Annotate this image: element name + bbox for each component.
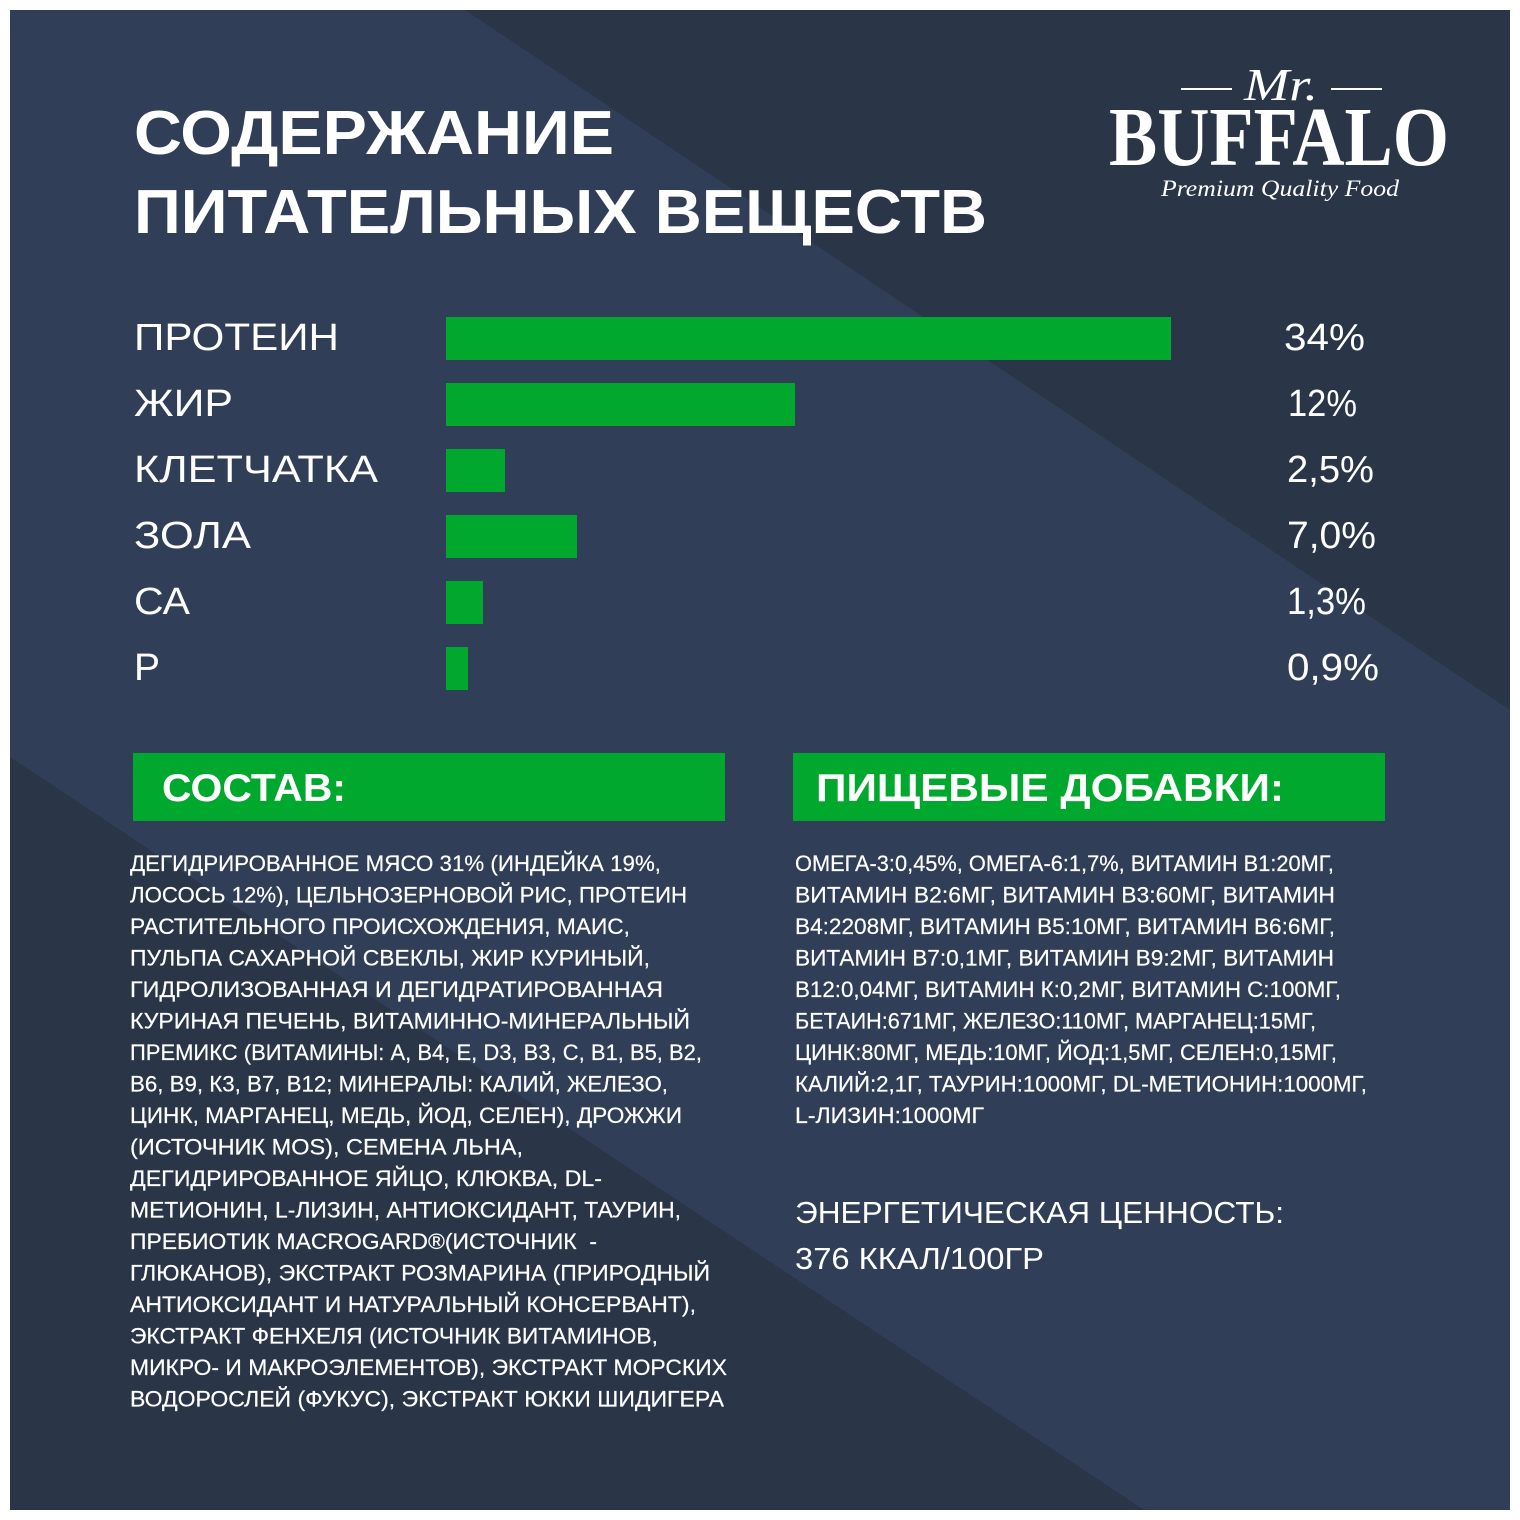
text block: composition: В6, В9, К3, В7, В12; МИНЕРАЛЫ: КАЛИЙ, ЖЕЛЕЗО, [130,1072,668,1096]
text block: composition [130,851,727,1412]
text block: additives [795,851,1367,1128]
text block: additives: L-ЛИЗИН:1000МГ [795,1103,984,1128]
text block: composition: ГИДРОЛИЗОВАННАЯ И ДЕГИДРАТИРОВАННАЯ [130,977,663,1002]
text block: composition: ВОДОРОСЛЕЙ (ФУКУС), ЭКСТРАКТ ЮККИ ШИДИГЕРА [130,1386,724,1412]
text block: additives: ВИТАМИН В2:6МГ, ВИТАМИН В3:60МГ, ВИТАМИН [795,882,1335,908]
title: СОДЕРЖАНИЕ [134,99,614,168]
text block: composition: ДЕГИДРИРОВАННОЕ ЯЙЦО, КЛЮКВА, DL- [130,1166,602,1191]
text block: energy value [795,1195,1284,1276]
logo: Mr. Buffalo [1109,59,1449,201]
logo: Mr. Buffalo: Premium Quality Food [1160,176,1400,201]
row: calcium: 1,3% [1287,581,1366,623]
text block: composition: ЭКСТРАКТ ФЕНХЕЛЯ (ИСТОЧНИК ВИТАМИНОВ, [130,1324,658,1348]
row: calcium: СА [134,581,191,623]
text block: composition: ЛОСОСЬ 12%), ЦЕЛЬНОЗЕРНОВОЙ РИС, ПРОТЕИН [130,882,687,908]
text block: composition: (ИСТОЧНИК MOS), СЕМЕНА ЛЬНА, [130,1134,523,1160]
row: protein: ПРОТЕИН [134,317,339,359]
row: ash [134,515,1376,558]
text block: additives: ОМЕГА-3:0,45%, ОМЕГА-6:1,7%, ВИТАМИН В1:20МГ, [795,851,1334,876]
text block: additives: БЕТАИН:671МГ, ЖЕЛЕЗО:110МГ, МАРГАНЕЦ:15МГ, [795,1008,1316,1034]
row: ash: 7,0% [1287,515,1376,557]
row: protein [134,317,1365,360]
row: ash: ЗОЛА [134,515,252,557]
row: phosphorus [134,647,1379,690]
text block: composition: МЕТИОНИН, L-ЛИЗИН, АНТИОКСИДАНТ, ТАУРИН, [130,1198,681,1222]
text block: energy value: 376 ККАЛ/100ГР [795,1241,1044,1276]
bar chart: nutrients [134,317,1379,690]
text block: additives: КАЛИЙ:2,1Г, ТАУРИН:1000МГ, DL-МЕТИОНИН:1000МГ, [795,1072,1367,1096]
text block: additives: В12:0,04МГ, ВИТАМИН К:0,2МГ, ВИТАМИН С:100МГ, [795,977,1341,1002]
text block: composition: ГЛЮКАНОВ), ЭКСТРАКТ РОЗМАРИНА (ПРИРОДНЫЙ [130,1260,710,1286]
text block: composition: КУРИНАЯ ПЕЧЕНЬ, ВИТАМИННО-МИНЕРАЛЬНЫЙ [130,1008,690,1034]
text block: composition: МИКРО- И МАКРОЭЛЕМЕНТОВ), ЭКСТРАКТ МОРСКИХ [130,1355,727,1380]
text block: composition: ПРЕМИКС (ВИТАМИНЫ: А, В4, Е, D3, В3, С, В1, В5, В2, [130,1040,702,1065]
heading: additives [793,753,1385,821]
text block: energy value: ЭНЕРГЕТИЧЕСКАЯ ЦЕННОСТЬ: [795,1195,1284,1230]
title: ПИТАТЕЛЬНЫХ ВЕЩЕСТВ [134,178,987,247]
heading: composition [133,753,725,821]
logo: Mr. Buffalo: Mr. [1243,59,1318,110]
text block: composition: ПУЛЬПА САХАРНОЙ СВЕКЛЫ, ЖИР КУРИНЫЙ, [130,946,650,970]
row: fat: 12% [1288,383,1357,425]
text block: additives: В4:2208МГ, ВИТАМИН В5:10МГ, ВИТАМИН В6:6МГ, [795,914,1335,939]
text block: additives: ВИТАМИН В7:0,1МГ, ВИТАМИН В9:2МГ, ВИТАМИН [795,946,1334,970]
title [134,99,987,247]
text block: composition: ЦИНК, МАРГАНЕЦ, МЕДЬ, ЙОД, СЕЛЕН), ДРОЖЖИ [130,1103,682,1128]
row: phosphorus: Р [134,647,160,689]
row: fat [134,383,1357,426]
heading: additives: ПИЩЕВЫЕ ДОБАВКИ: [816,767,1284,810]
logo: Mr. Buffalo: BUFFALO [1109,91,1449,184]
row: fibre: 2,5% [1287,449,1374,491]
text block: additives: ЦИНК:80МГ, МЕДЬ:10МГ, ЙОД:1,5МГ, СЕЛЕН:0,15МГ, [795,1040,1337,1065]
row: phosphorus: 0,9% [1287,647,1379,689]
text block: composition: ДЕГИДРИРОВАННОЕ МЯСО 31% (ИНДЕЙКА 19%, [130,851,661,876]
text block: composition: АНТИОКСИДАНТ И НАТУРАЛЬНЫЙ КОНСЕРВАНТ), [130,1292,696,1317]
text block: composition: ПРЕБИОТИК MACROGARD®(ИСТОЧНИК - [130,1229,597,1254]
row: calcium [134,581,1366,624]
row: fibre: КЛЕТЧАТКА [134,449,379,491]
row: protein: 34% [1284,317,1365,359]
row: fibre [134,449,1374,492]
row: fat: ЖИР [134,383,233,425]
heading: composition: СОСТАВ: [162,767,346,810]
text block: composition: РАСТИТЕЛЬНОГО ПРОИСХОЖДЕНИЯ, МАИС, [130,914,630,939]
